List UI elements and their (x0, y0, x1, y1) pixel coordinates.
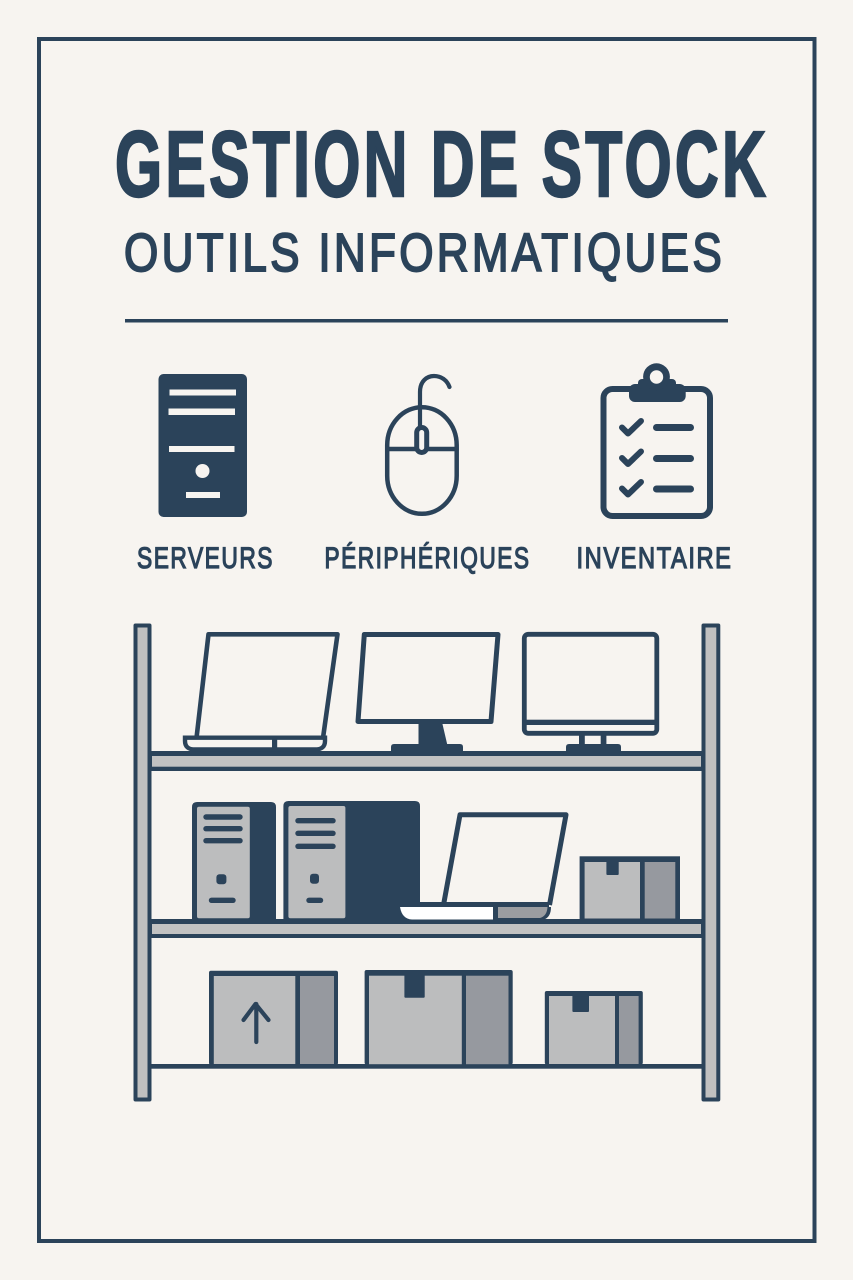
server tower 2 (283, 801, 420, 919)
bottom shelf (150, 1064, 703, 1069)
label: serveurs: SERVEURS (137, 542, 274, 575)
right post (704, 626, 718, 1100)
large box, bottom shelf (365, 970, 513, 1064)
left post (136, 626, 150, 1100)
monitor, top shelf (524, 634, 657, 751)
icon: clipboard checklist (604, 363, 710, 516)
server tower 1 (192, 802, 276, 919)
subtitle: OUTILS INFORMATIQUES (124, 223, 725, 283)
label: inventaire: INVENTAIRE (576, 542, 732, 575)
laptop, top shelf (185, 634, 338, 750)
shelving unit (136, 626, 718, 1100)
middle shelf (150, 919, 703, 938)
medium box, bottom shelf (545, 991, 643, 1064)
label: périphériques: PÉRIPHÉRIQUES (324, 542, 530, 575)
icon: server tower (158, 374, 247, 517)
icon: up arrow (244, 1004, 268, 1042)
top shelf (150, 751, 703, 771)
monitor on foot, top shelf (358, 634, 498, 751)
icon: computer mouse (387, 376, 457, 514)
laptop, middle shelf (400, 815, 566, 920)
small box, middle shelf (580, 856, 680, 919)
divider (125, 319, 728, 322)
box with up arrow, bottom shelf (209, 971, 338, 1065)
